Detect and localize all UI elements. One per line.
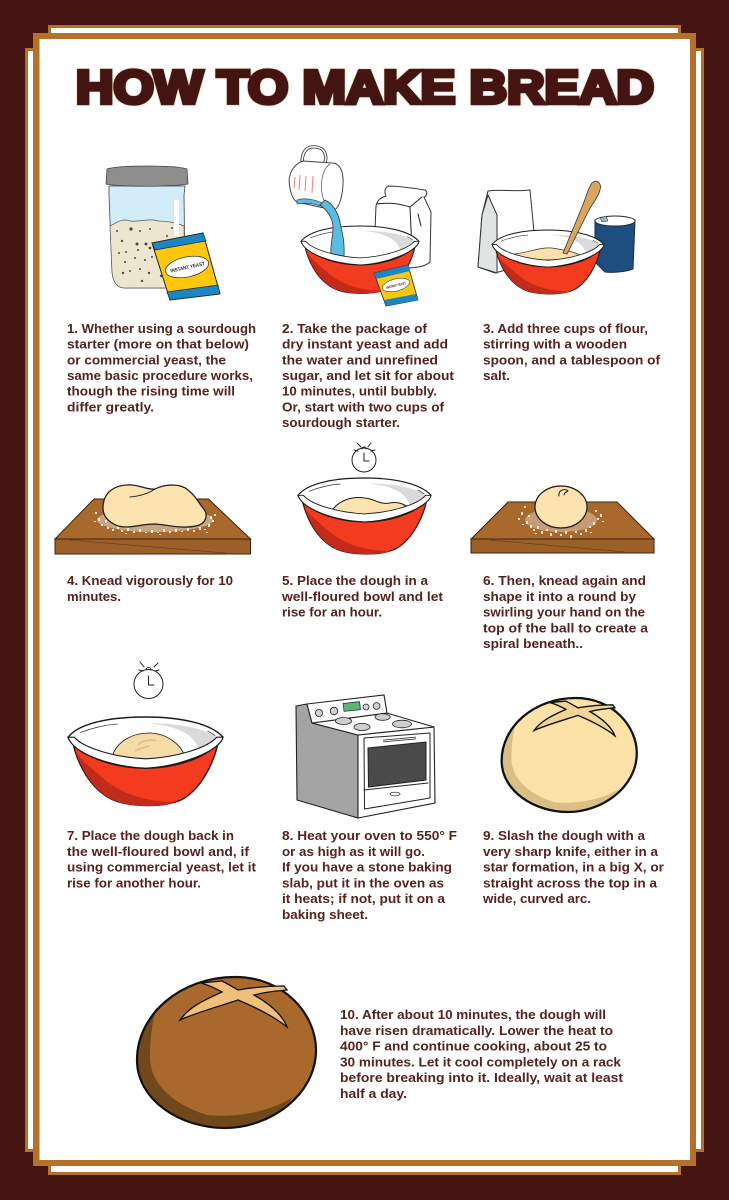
title: HOW TO MAKE BREAD (76, 61, 654, 113)
text: step 5: 5. Place the dough in a (282, 573, 429, 588)
icon: baked loaf (137, 977, 316, 1128)
text: step 9: 9. Slash the dough with a (483, 828, 646, 843)
text: step 9: very sharp knife, either in a (483, 844, 659, 859)
text: step 2: dry instant yeast and add (282, 337, 448, 352)
icon: small yeast packet (374, 265, 418, 306)
panel: step 5 (281, 443, 444, 620)
text: step 1: starter (more on that below) (67, 337, 249, 352)
text: step 1 (67, 321, 256, 414)
panel: step 1 (67, 166, 256, 414)
icon: small yeast packet: INSTANT YEAST (386, 281, 407, 290)
text: step 7: rise for another hour. (67, 875, 201, 890)
text: step 5 (281, 573, 444, 620)
text: step 6: shape it into a round by (483, 589, 637, 604)
text: step 10: 30 minutes. Let it cool completely on a rack (340, 1054, 622, 1069)
text: step 6: spiral beneath.. (483, 636, 583, 651)
text: step 8: slab, put it in the oven as (282, 875, 444, 890)
text: step 6: top of the ball to create a (483, 620, 649, 635)
text: step 1: 1. Whether using a sourdough (67, 321, 256, 336)
text: step 8: it heats; if not, put it on a (282, 891, 446, 906)
icon: flour bag (478, 190, 534, 273)
text: step 7: the well-floured bowl and, if (67, 844, 250, 859)
panel: step 8 (282, 695, 457, 922)
text: step 8: or as high as it will go. (282, 844, 425, 859)
text: step 7: 7. Place the dough back in (67, 828, 234, 843)
icon: slashed raw dough (502, 698, 637, 812)
panel: step 3 (478, 181, 661, 383)
text: step 3: 3. Add three cups of flour, (483, 321, 648, 336)
panel: step 2 (282, 147, 455, 430)
text: step 5: well-floured bowl and let (281, 589, 444, 604)
text: step 6 (483, 573, 649, 651)
text: step 1: same basic procedure works, (67, 368, 253, 383)
text: step 2: 2. Take the package of (282, 321, 428, 336)
text: step 9: star formation, in a big X, or (483, 860, 664, 874)
text: step 6: 6. Then, knead again and (483, 573, 646, 588)
panel: step 10 (137, 977, 624, 1128)
icon: timer (134, 662, 163, 698)
text: step 5: rise for an hour. (282, 604, 382, 620)
text: step 8: If you have a stone baking (282, 860, 452, 874)
text: step 8: baking sheet. (282, 907, 368, 922)
text: step 8: 8. Heat your oven to 550° F (282, 828, 457, 843)
icon: dough on cutting board (55, 485, 250, 554)
text: step 4 (67, 573, 233, 604)
text: step 3: salt. (483, 368, 510, 383)
panel: step 4 (55, 485, 250, 604)
text: step 9: straight across the top in a (483, 875, 658, 890)
text: step 10: before breaking into it. Ideally, wait at least (340, 1070, 624, 1085)
icon: salt can (595, 216, 635, 272)
text: step 1: differ greatly. (67, 399, 154, 414)
icon: mixing bowl with water (297, 199, 419, 294)
icon: dough ball on cutting board (471, 486, 654, 553)
panel: step 9 (482, 698, 664, 906)
panel: step 6 (471, 486, 654, 651)
text: step 2 (282, 321, 455, 430)
icon: starter jar and yeast packet: INSTANT YEAST (170, 261, 205, 274)
text: step 3 (483, 321, 661, 383)
icon: mixing bowl with spoon (492, 181, 604, 294)
text: step 2: the water and unrefined (282, 352, 438, 367)
text: step 3: spoon, and a tablespoon of (483, 352, 661, 367)
icon: round dough in bowl (68, 717, 223, 806)
text: step 10: 10. After about 10 minutes, the dough will (340, 1007, 606, 1022)
text: step 4: minutes. (67, 589, 121, 604)
text: step 8 (282, 828, 457, 922)
text: step 4: 4. Knead vigorously for 10 (67, 573, 233, 588)
text: step 9 (482, 828, 664, 906)
icon: measuring cup pouring water (289, 147, 343, 210)
text: step 10 (340, 1007, 624, 1101)
text: step 2: sourdough starter. (282, 415, 400, 430)
text: step 2: Or, start with two cups of (282, 399, 445, 414)
text: step 2: 10 minutes, until bubbly. (282, 384, 437, 399)
text: step 9: wide, curved arc. (482, 891, 591, 906)
text: step 10: have risen dramatically. Lower the heat to (340, 1023, 613, 1038)
panel: step 7 (67, 662, 257, 890)
text: step 10: half a day. (340, 1086, 407, 1101)
text: step 7 (67, 828, 257, 890)
icon: dough rising in bowl (298, 478, 431, 554)
icon: oven (296, 695, 435, 818)
icon: starter jar and yeast packet (106, 166, 220, 300)
icon: timer (352, 443, 376, 472)
text: step 7: using commercial yeast, let it (67, 860, 257, 874)
text: step 6: swirling your hand on the (483, 604, 645, 620)
text: step 10: 400° F and continue cooking, about 25 to (340, 1038, 607, 1054)
icon: flour bag (375, 186, 431, 268)
text: step 2: sugar, and let sit for about (282, 368, 455, 383)
text: step 1: though the rising time will (67, 384, 235, 399)
text: step 3: stirring with a wooden (483, 337, 627, 352)
text: step 1: or commercial yeast, the (67, 352, 226, 367)
